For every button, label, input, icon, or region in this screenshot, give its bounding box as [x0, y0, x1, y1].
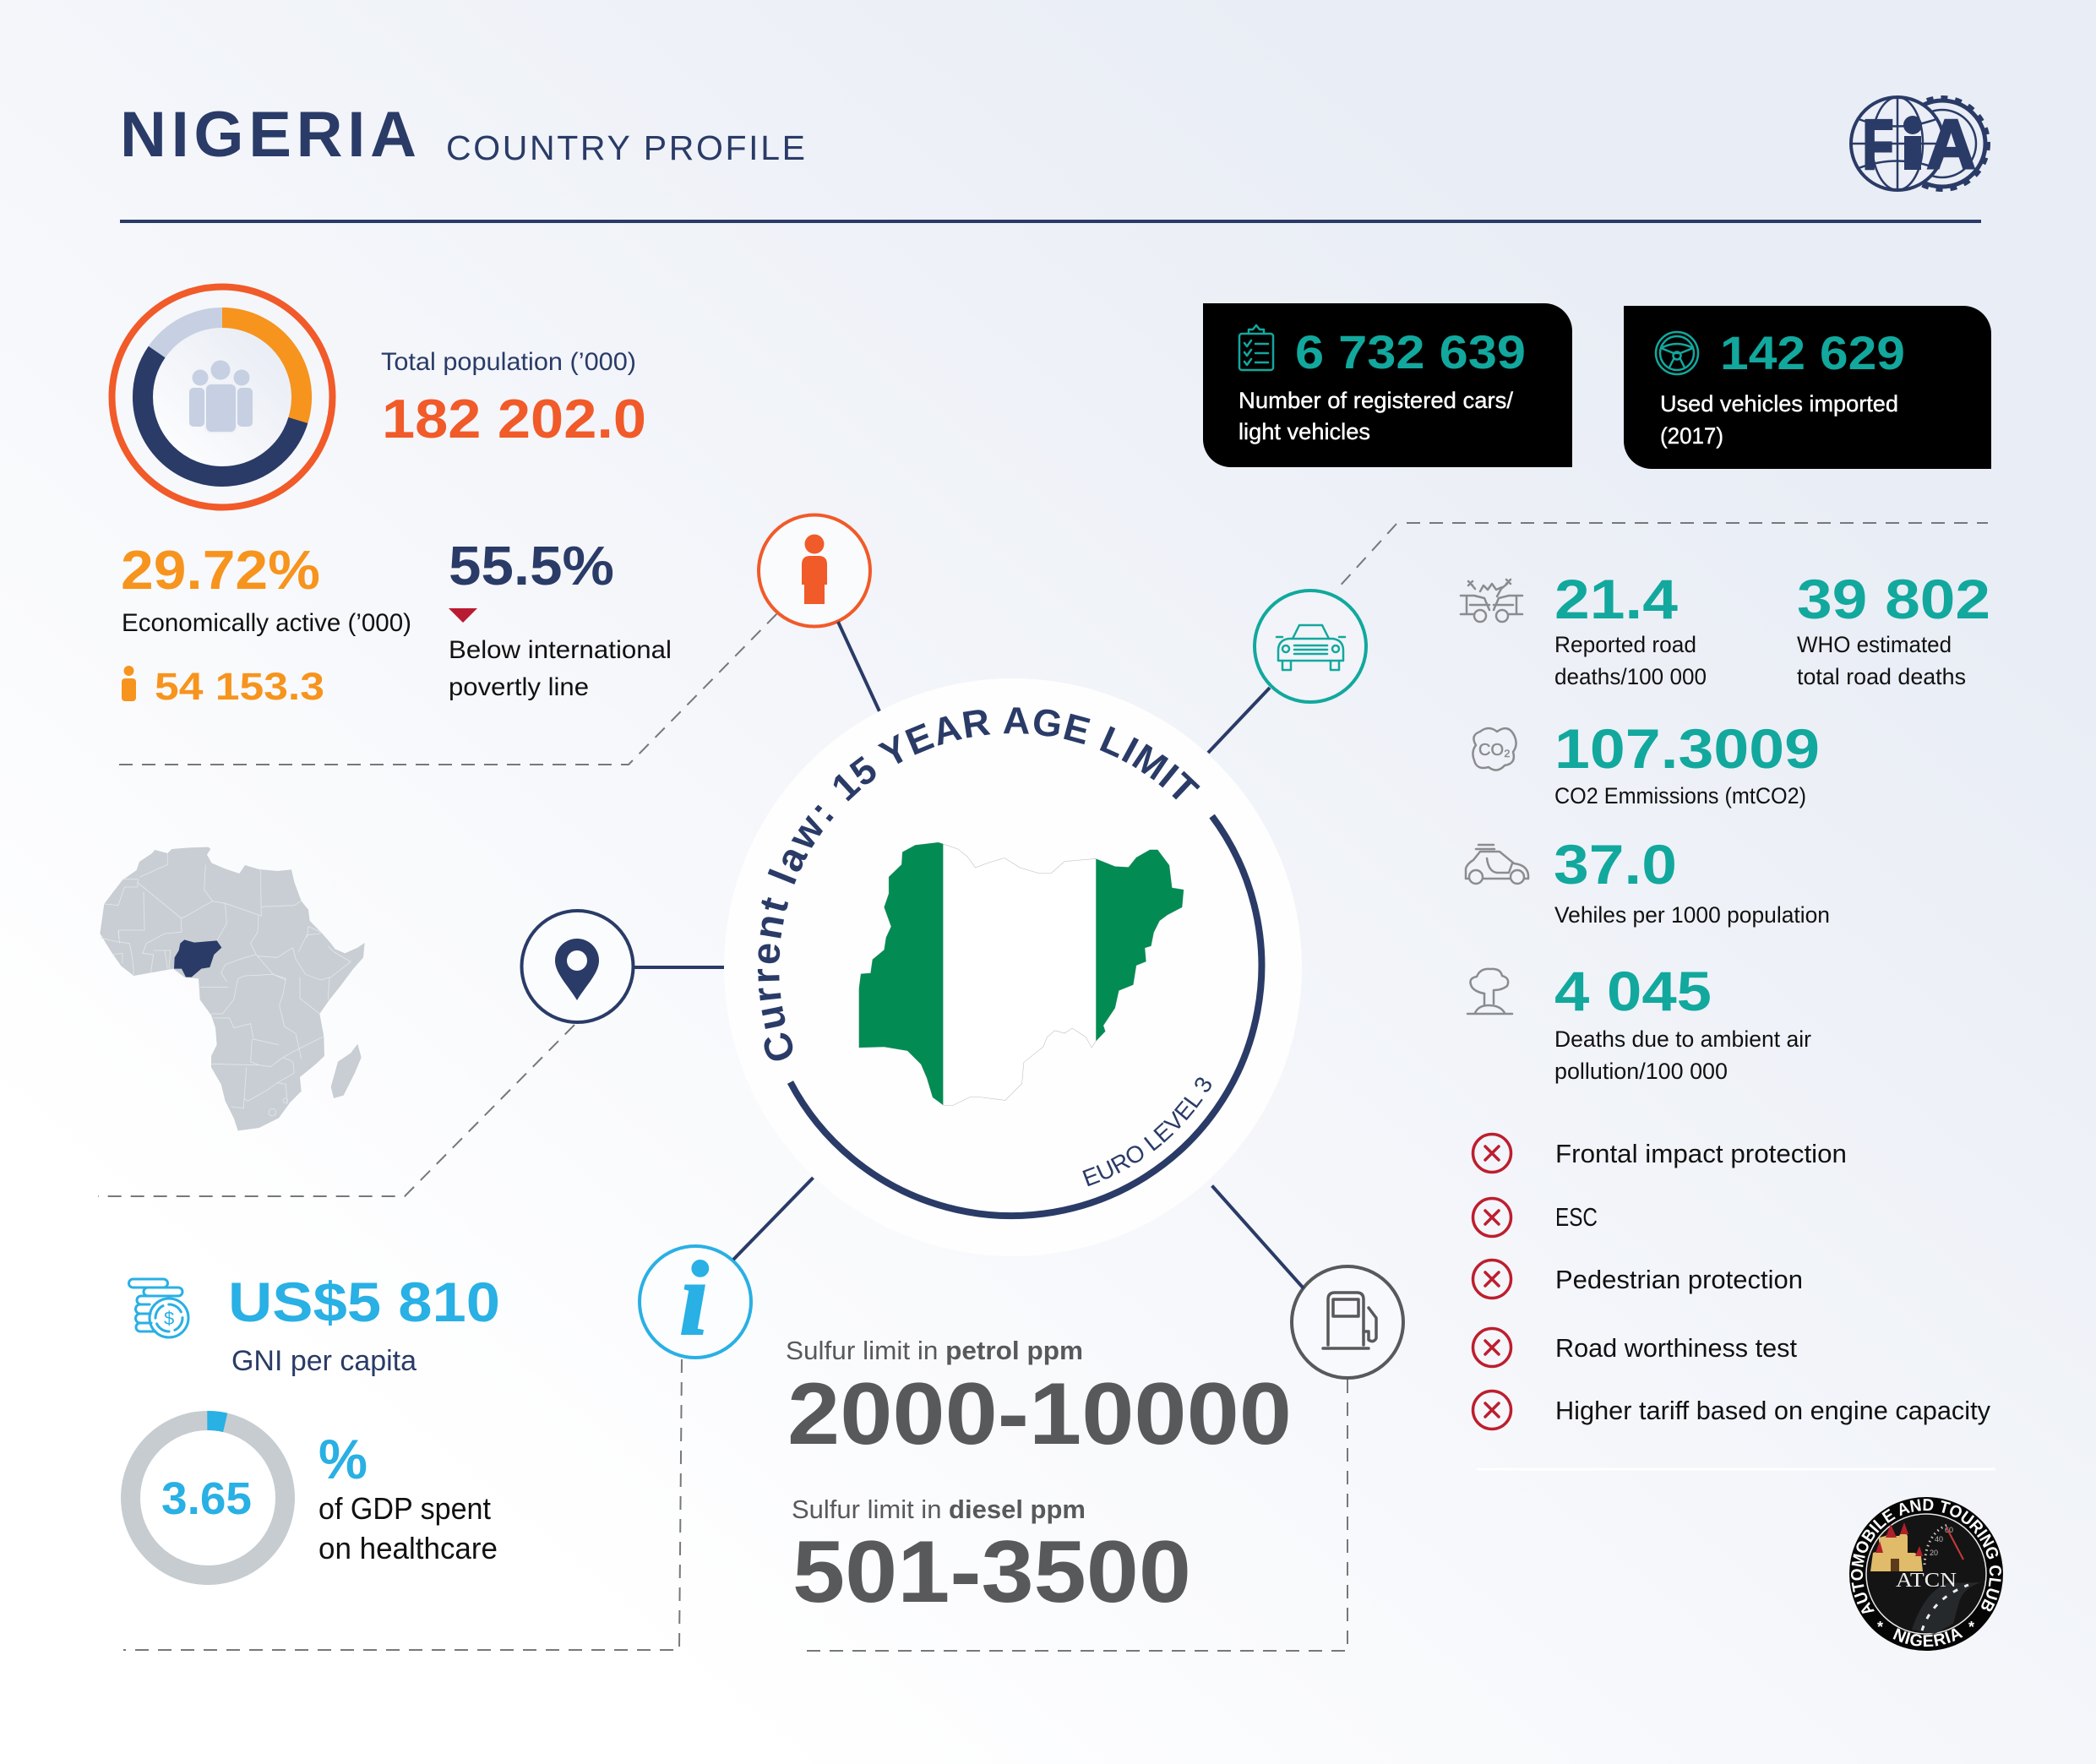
CO2 value: 107.3009	[1554, 717, 1820, 780]
wordmark: ATCN	[1896, 1570, 1957, 1592]
estimated deaths value: 39 802	[1797, 568, 1990, 630]
icon: car side	[1466, 845, 1528, 884]
healthcare donut	[130, 1421, 286, 1575]
item: tariff	[1473, 1391, 1990, 1429]
registered label: Number of registered cars/	[1239, 388, 1514, 413]
percent sign: %	[318, 1428, 367, 1490]
economically active share: 29.72%	[121, 539, 320, 601]
petrol value: 2000-10000	[787, 1365, 1292, 1463]
road deaths label: deaths/100 000	[1554, 664, 1707, 689]
icon: car crash	[1461, 580, 1522, 622]
panel: population	[112, 287, 672, 708]
population ring chart	[112, 287, 333, 507]
icon: people	[189, 360, 253, 433]
diesel label: Sulfur limit in diesel ppm	[792, 1494, 1086, 1524]
poverty label: povertly line	[449, 673, 589, 701]
stars: *	[1968, 1619, 1974, 1636]
road deaths rate: 21.4	[1554, 568, 1678, 630]
petrol label: Sulfur limit in petrol ppm	[786, 1336, 1083, 1365]
total population value: 182 202.0	[382, 388, 646, 449]
panel: road statistics	[1461, 568, 1990, 1084]
map: Nigeria flag	[853, 837, 1189, 1109]
speedometer: 40	[1935, 1535, 1943, 1544]
CO2 label: CO2 Emmissions (mtCO2)	[1554, 783, 1806, 808]
used vehicles label: (2017)	[1660, 423, 1723, 449]
air pollution label	[1554, 1026, 1811, 1084]
icon: smoke	[1467, 969, 1512, 1014]
registered label: light vehicles	[1239, 419, 1370, 444]
castle	[1870, 1522, 1923, 1571]
GNI value: US$5 810	[228, 1271, 500, 1333]
item: road worthiness: Road worthiness test	[1555, 1333, 1797, 1363]
used vehicles label	[1660, 391, 1898, 449]
item: ESC: ESC	[1555, 1202, 1598, 1232]
used vehicles label: Used vehicles imported	[1660, 391, 1898, 416]
estimated deaths label	[1797, 632, 1966, 689]
icon: coins: $	[164, 1308, 174, 1329]
poverty label: Below international	[449, 636, 672, 664]
checklist: safety requirements	[1473, 1134, 1990, 1429]
icon: steering wheel	[1656, 332, 1698, 374]
item: frontal impact: Frontal impact protection	[1555, 1139, 1847, 1168]
logo: FIA	[1851, 97, 1989, 190]
item: frontal impact	[1473, 1134, 1847, 1173]
logo: ATCN	[1849, 1497, 2003, 1651]
item: pedestrian	[1473, 1260, 1803, 1298]
healthcare label: of GDP spent	[318, 1491, 491, 1526]
road deaths label: Reported road	[1554, 632, 1696, 657]
logo: FIA: F	[1863, 106, 1893, 183]
panel: used vehicles	[1624, 306, 1991, 469]
icon: location pin	[522, 911, 634, 1022]
road deaths label	[1554, 632, 1707, 689]
vehicles value: 37.0	[1554, 833, 1677, 896]
stars: *	[1877, 1619, 1883, 1636]
registered value: 6 732 639	[1295, 325, 1526, 378]
vehicles label: Vehiles per 1000 population	[1554, 902, 1830, 928]
healthcare label: on healthcare	[318, 1531, 498, 1565]
icon: clipboard	[1239, 325, 1273, 370]
ring text lower: NIGERIA	[1892, 1628, 1963, 1647]
GNI label: GNI per capita	[231, 1345, 416, 1377]
registered label	[1239, 388, 1514, 444]
item: road worthiness	[1473, 1328, 1797, 1367]
map: Africa	[100, 847, 365, 1130]
poverty share: 55.5%	[449, 535, 614, 596]
euro level: EURO LEVEL 3	[1082, 1077, 1211, 1186]
item: ESC	[1473, 1198, 1598, 1237]
speedometer: 60	[1945, 1526, 1953, 1534]
air pollution label: pollution/100 000	[1554, 1059, 1728, 1084]
healthcare value: 3.65	[161, 1473, 252, 1524]
road	[1912, 1582, 1981, 1634]
estimated deaths label: WHO estimated	[1797, 632, 1952, 657]
logo: FIA: A	[1927, 106, 1975, 183]
icon: CO2 cloud	[1473, 728, 1516, 770]
icon: person small	[122, 666, 136, 701]
item: tariff: Higher tariff based on engine capacity	[1555, 1396, 1990, 1425]
panel: registered cars	[1203, 303, 1572, 467]
logo: FIA: i	[1905, 130, 1920, 177]
icon: coins	[128, 1279, 188, 1337]
icon: down triangle	[449, 608, 477, 623]
icon: fuel pump	[1292, 1266, 1403, 1378]
panel: central badge	[747, 678, 1302, 1220]
total population label: Total population (’000)	[381, 348, 636, 376]
icon: person circle	[759, 515, 870, 627]
item: pedestrian: Pedestrian protection	[1555, 1265, 1803, 1294]
panel: income and health	[128, 1271, 500, 1575]
diesel value: 501-3500	[792, 1523, 1191, 1621]
economically active value: 54 153.3	[155, 665, 324, 708]
used vehicles value: 142 629	[1720, 326, 1905, 379]
title	[120, 99, 805, 171]
icon: car circle	[1255, 591, 1366, 702]
map highlight: Nigeria	[174, 939, 221, 977]
speedometer: 20	[1930, 1549, 1938, 1557]
panel: sulfur limits	[786, 1336, 1292, 1621]
estimated deaths label: total road deaths	[1797, 664, 1966, 689]
air pollution value: 4 045	[1554, 960, 1712, 1022]
stars	[1877, 1619, 1974, 1636]
speedometer	[1925, 1525, 1963, 1565]
title: NIGERIA	[120, 99, 416, 171]
air pollution label: Deaths due to ambient air	[1554, 1026, 1811, 1052]
curved heading: Current law: 15 YEAR AGE LIMIT	[757, 707, 1200, 1061]
healthcare label	[318, 1491, 498, 1565]
icon: information: i	[679, 1241, 709, 1358]
icon: CO2 cloud: CO₂	[1478, 741, 1511, 760]
economically active label: Economically active (’000)	[122, 609, 411, 637]
title: COUNTRY PROFILE	[446, 128, 805, 167]
arc	[791, 816, 1261, 1216]
icon: information	[640, 1241, 751, 1358]
ring text: AUTOMOBILE AND TOURING CLUB	[1850, 1499, 2001, 1614]
poverty label	[449, 636, 672, 701]
